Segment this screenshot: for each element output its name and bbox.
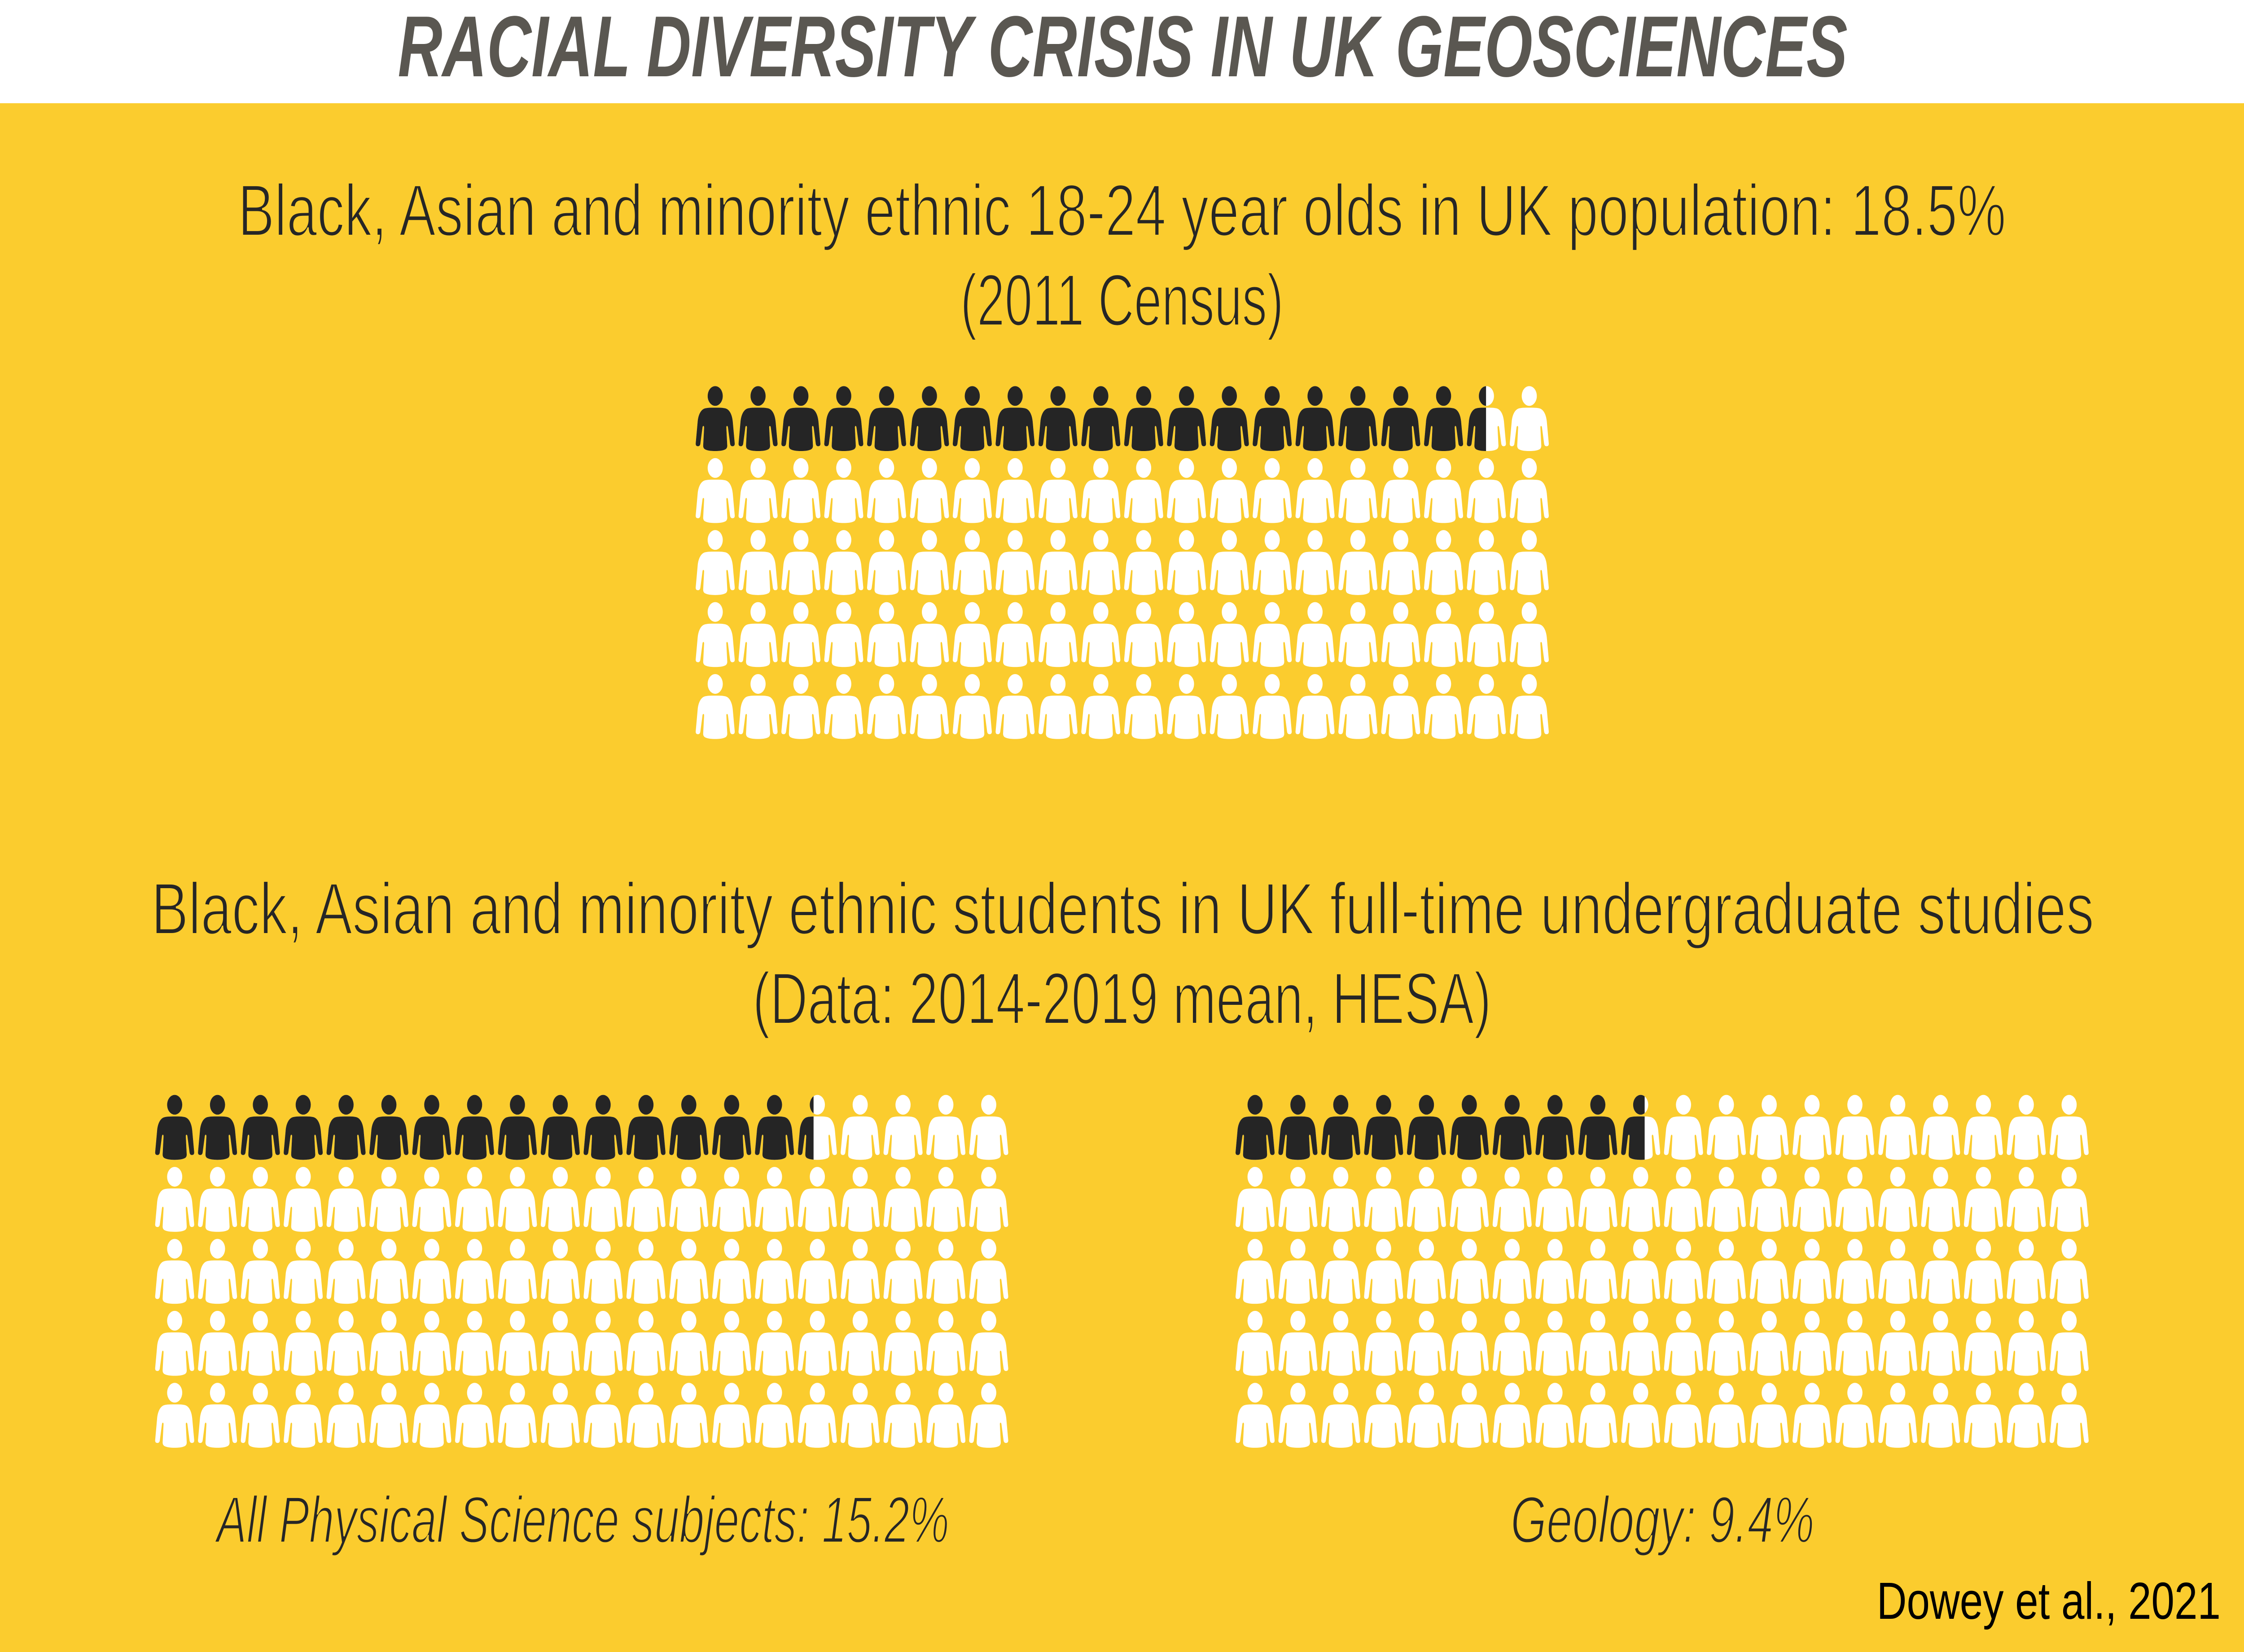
heading: undergraduate studies — [151, 868, 2094, 1039]
heading: undergraduate studies: Black, Asian and minority ethnic students in UK full-time undergraduate studies — [151, 868, 2094, 950]
pictogram: physical sciences 15.2% — [155, 1095, 1008, 1448]
caption: physical sciences: All Physical Science subjects: 15.2% — [214, 1482, 949, 1556]
title banner — [0, 0, 2244, 103]
heading: UK population: (2011 Census) — [960, 259, 1284, 341]
title: RACIAL DIVERSITY CRISIS IN UK GEOSCIENCES — [398, 0, 1848, 95]
pictogram: UK population 18.5% — [696, 386, 1549, 739]
caption: geology: Geology: 9.4% — [1511, 1482, 1814, 1556]
citation: Dowey et al., 2021 — [1877, 1571, 2221, 1630]
heading: UK population: Black, Asian and minority ethnic 18-24 year olds in UK population: 18.5% — [238, 170, 2006, 251]
heading: undergraduate studies: (Data: 2014-2019 mean, HESA) — [753, 958, 1491, 1039]
pictogram: geology 9.4% — [1236, 1095, 2089, 1448]
heading: UK population — [238, 170, 2006, 341]
